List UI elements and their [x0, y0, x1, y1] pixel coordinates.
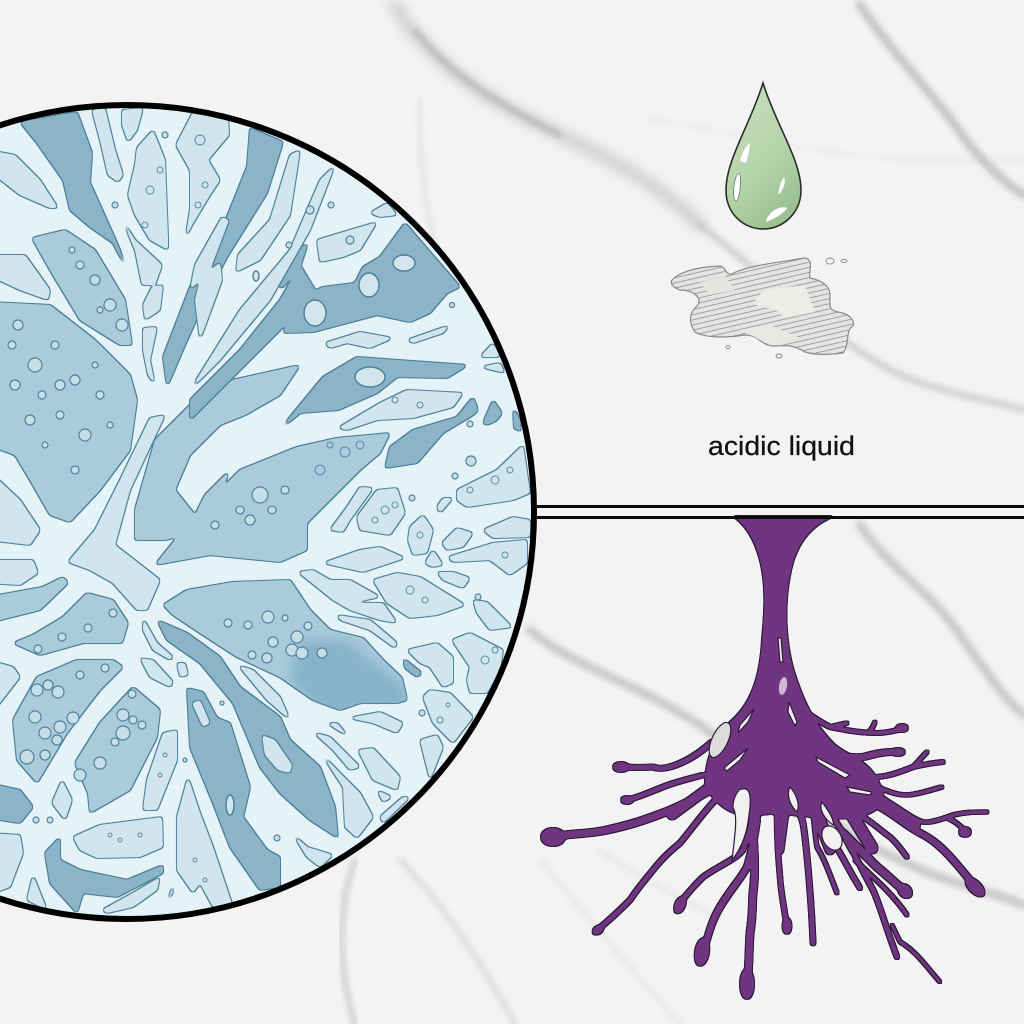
purple stain spreading from the divider	[541, 516, 988, 999]
label: acidic liquid: acidic liquid	[708, 431, 855, 461]
bubbles	[8, 132, 481, 841]
magnified circle: acid-etched surface	[0, 100, 540, 930]
divider: double rule	[533, 505, 1024, 519]
soft shading on the central patch	[290, 640, 410, 715]
icon: grey residue puddle	[670, 257, 854, 358]
icon: green acid droplet	[726, 83, 801, 229]
light islands in dark pools	[226, 255, 415, 815]
